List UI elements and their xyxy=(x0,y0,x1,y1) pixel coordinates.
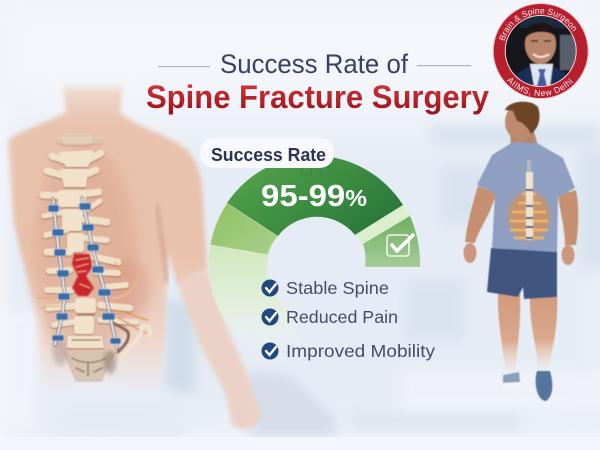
success rate pill xyxy=(200,138,334,168)
torso and arm xyxy=(7,84,207,415)
title rule left xyxy=(158,66,210,67)
walking man xyxy=(464,102,578,401)
title line 1: Success Rate of xyxy=(220,49,408,79)
vertebral bodies xyxy=(58,133,116,380)
shading around spine xyxy=(33,145,137,365)
right arm xyxy=(558,190,578,245)
gauge pale strip xyxy=(355,205,410,244)
shoes xyxy=(503,372,520,383)
sacrum shadows xyxy=(72,315,106,376)
badge bottom text: AIIMS, New Delhi xyxy=(506,78,573,96)
patient back with instrumented spine xyxy=(0,68,260,440)
icon: small faded checkboxes xyxy=(302,167,330,175)
benefits list xyxy=(262,278,435,361)
icon: checkbox xyxy=(387,235,413,256)
transverse processes xyxy=(43,140,137,325)
shorts xyxy=(487,248,557,299)
legs xyxy=(498,293,520,372)
pelvic outline xyxy=(112,322,128,352)
title xyxy=(146,49,489,115)
gauge lime segment xyxy=(210,203,278,255)
surgeon badge xyxy=(492,3,589,99)
forearm and hand xyxy=(177,268,260,429)
neck and head xyxy=(510,128,538,146)
fracture site xyxy=(72,254,94,296)
gauge value: 95-99% xyxy=(261,178,367,213)
gauge right segment xyxy=(363,216,420,267)
fog over body edges xyxy=(0,68,215,440)
pedicle screws xyxy=(48,203,121,344)
title line 2: Spine Fracture Surgery xyxy=(146,79,489,115)
success gauge xyxy=(200,138,420,350)
spine on shirt xyxy=(508,160,550,240)
nerves xyxy=(38,262,148,333)
benefit: reduced pain: Reduced Pain xyxy=(286,307,398,327)
badge top text: Brain & Spine Surgeon xyxy=(499,8,576,41)
gauge dark segment xyxy=(227,156,403,236)
success rate pill: Success Rate xyxy=(211,144,326,165)
gauge lower faded band xyxy=(209,245,300,350)
rods xyxy=(53,199,65,345)
benefit: stable spine: Stable Spine xyxy=(286,278,389,298)
spine vertebrae xyxy=(38,133,151,380)
left arm xyxy=(465,186,496,243)
surgeon portrait xyxy=(505,15,578,90)
t-shirt xyxy=(477,142,575,252)
background: blurred hospital xyxy=(10,118,600,437)
arm crease shading xyxy=(157,205,167,283)
benefit: improved mobility: Improved Mobility xyxy=(286,341,435,361)
title rule right xyxy=(417,65,471,66)
